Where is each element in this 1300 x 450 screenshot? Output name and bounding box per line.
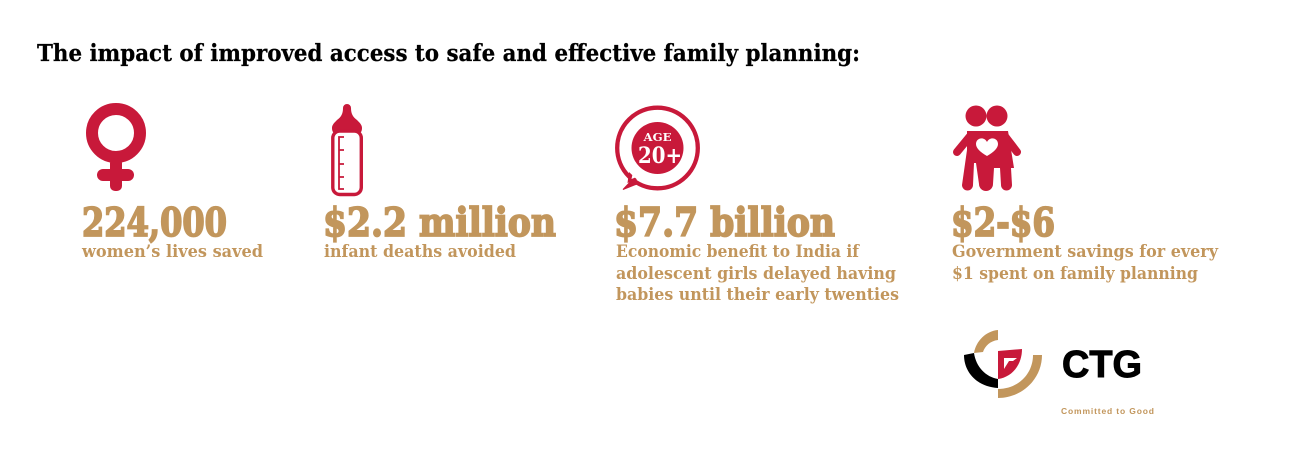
panel: women's lives saved <box>81 109 263 262</box>
panel: infant deaths avoided <box>323 104 556 262</box>
logo: CTG <box>964 330 1154 416</box>
stat: 224,000: 224,000 <box>82 200 227 246</box>
panel: economic benefit <box>614 108 899 305</box>
caption: women's lives saved: women’s lives saved <box>81 242 263 262</box>
icon: baby bottle <box>332 104 362 194</box>
caption: government savings: Government savings for every <box>952 242 1219 262</box>
panel: government savings <box>951 106 1219 284</box>
stat: $2.2 million: $2.2 million <box>323 200 556 246</box>
stat: $2-$6: $2-$6 <box>951 200 1055 246</box>
logo wordmark: CTG <box>1062 344 1142 386</box>
title: The impact of improved access to safe and effective family planning: <box>37 40 860 67</box>
stat: $7.7 billion: $7.7 billion <box>614 200 835 246</box>
logo mark <box>964 330 1042 398</box>
icon: age 20+ speech bubble <box>617 108 698 190</box>
tagline: Committed to Good <box>1061 406 1154 416</box>
icon: age 20+ speech bubble: 20+ <box>638 143 682 169</box>
caption: economic benefit to India <box>616 242 899 305</box>
caption: economic benefit to India: babies until their early twenties <box>616 285 899 305</box>
caption: economic benefit to India: Economic benefit to India if <box>616 242 861 262</box>
icon: two children with heart <box>957 106 1017 191</box>
caption: government savings: $1 spent on family planning <box>952 264 1198 284</box>
caption: infant deaths avoided: infant deaths avoided <box>324 242 516 262</box>
caption: government savings <box>952 242 1219 284</box>
caption: economic benefit to India: adolescent girls delayed having <box>616 264 896 284</box>
icon: female symbol <box>92 109 140 191</box>
icon: age 20+ speech bubble: AGE <box>642 131 672 144</box>
